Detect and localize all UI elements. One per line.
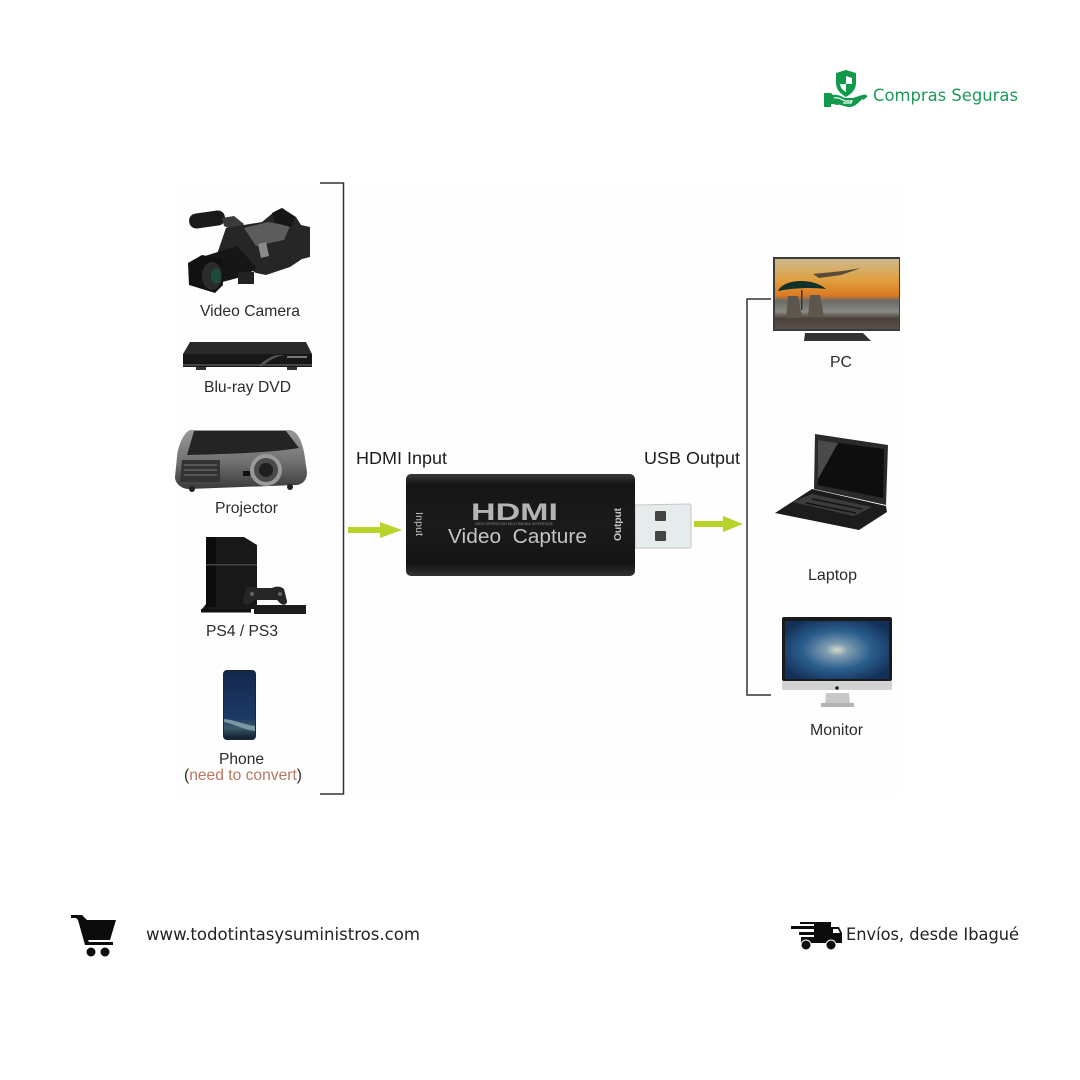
usb plug [635, 504, 691, 548]
label: Output: Output [612, 508, 624, 541]
item: monitor [782, 617, 892, 739]
item: PS4 / PS3 [201, 537, 306, 640]
label: need to convert: (need to convert) [184, 767, 302, 784]
heading: HDMI Input: HDMI Input [356, 448, 447, 468]
capture card body [406, 474, 635, 576]
logo: Compras Seguras [824, 70, 1018, 108]
label: PS4 / PS3: PS4 / PS3 [206, 623, 278, 640]
icon: shield and hand [824, 70, 867, 108]
icon: shopping cart [71, 915, 116, 956]
icon: game console [201, 537, 306, 614]
item: phone [184, 670, 302, 784]
logo: HDMI: HDMI [471, 499, 558, 526]
right bracket [747, 299, 771, 695]
text: website url: www.todotintasysuministros.com [146, 925, 420, 944]
label: Input: Input [413, 512, 425, 536]
label: Video Capture: Video Capture [448, 526, 587, 548]
item: video camera [188, 208, 310, 320]
footer: website [71, 915, 420, 956]
item: laptop [775, 434, 888, 584]
icon: iMac monitor [782, 617, 892, 707]
label: Blu-ray DVD: Blu-ray DVD [204, 379, 291, 396]
label: Projector: Projector [215, 500, 279, 517]
label: Video Camera: Video Camera [200, 303, 300, 320]
device: HDMI video capture [406, 474, 691, 576]
icon: TV with sunset [773, 257, 900, 341]
item: Blu-ray DVD [183, 342, 312, 396]
text: Compras Seguras: Compras Seguras [873, 86, 1018, 105]
label: Monitor: Monitor [810, 722, 864, 739]
label: PC: PC [830, 354, 852, 371]
text: shipping: Envíos, desde Ibagué [846, 925, 1019, 944]
heading: USB Output: USB Output [644, 448, 740, 468]
panel background: diagram [175, 183, 900, 798]
label: Phone: Phone [219, 751, 264, 768]
footer: shipping [791, 922, 1019, 950]
icon: delivery truck [791, 922, 842, 950]
tagline: HIGH DEFINITION MULTIMEDIA INTERFACE [475, 521, 553, 526]
left bracket [320, 183, 344, 794]
icon: Blu-ray player [183, 342, 312, 370]
item: PC [773, 257, 900, 371]
icon: projector [175, 430, 307, 492]
arrow: input [348, 522, 402, 538]
item: projector [175, 430, 307, 517]
arrow: output [694, 516, 743, 532]
icon: smartphone [223, 670, 256, 740]
label: Laptop: Laptop [808, 567, 857, 584]
icon: video camera [188, 208, 310, 293]
icon: laptop [775, 434, 888, 530]
